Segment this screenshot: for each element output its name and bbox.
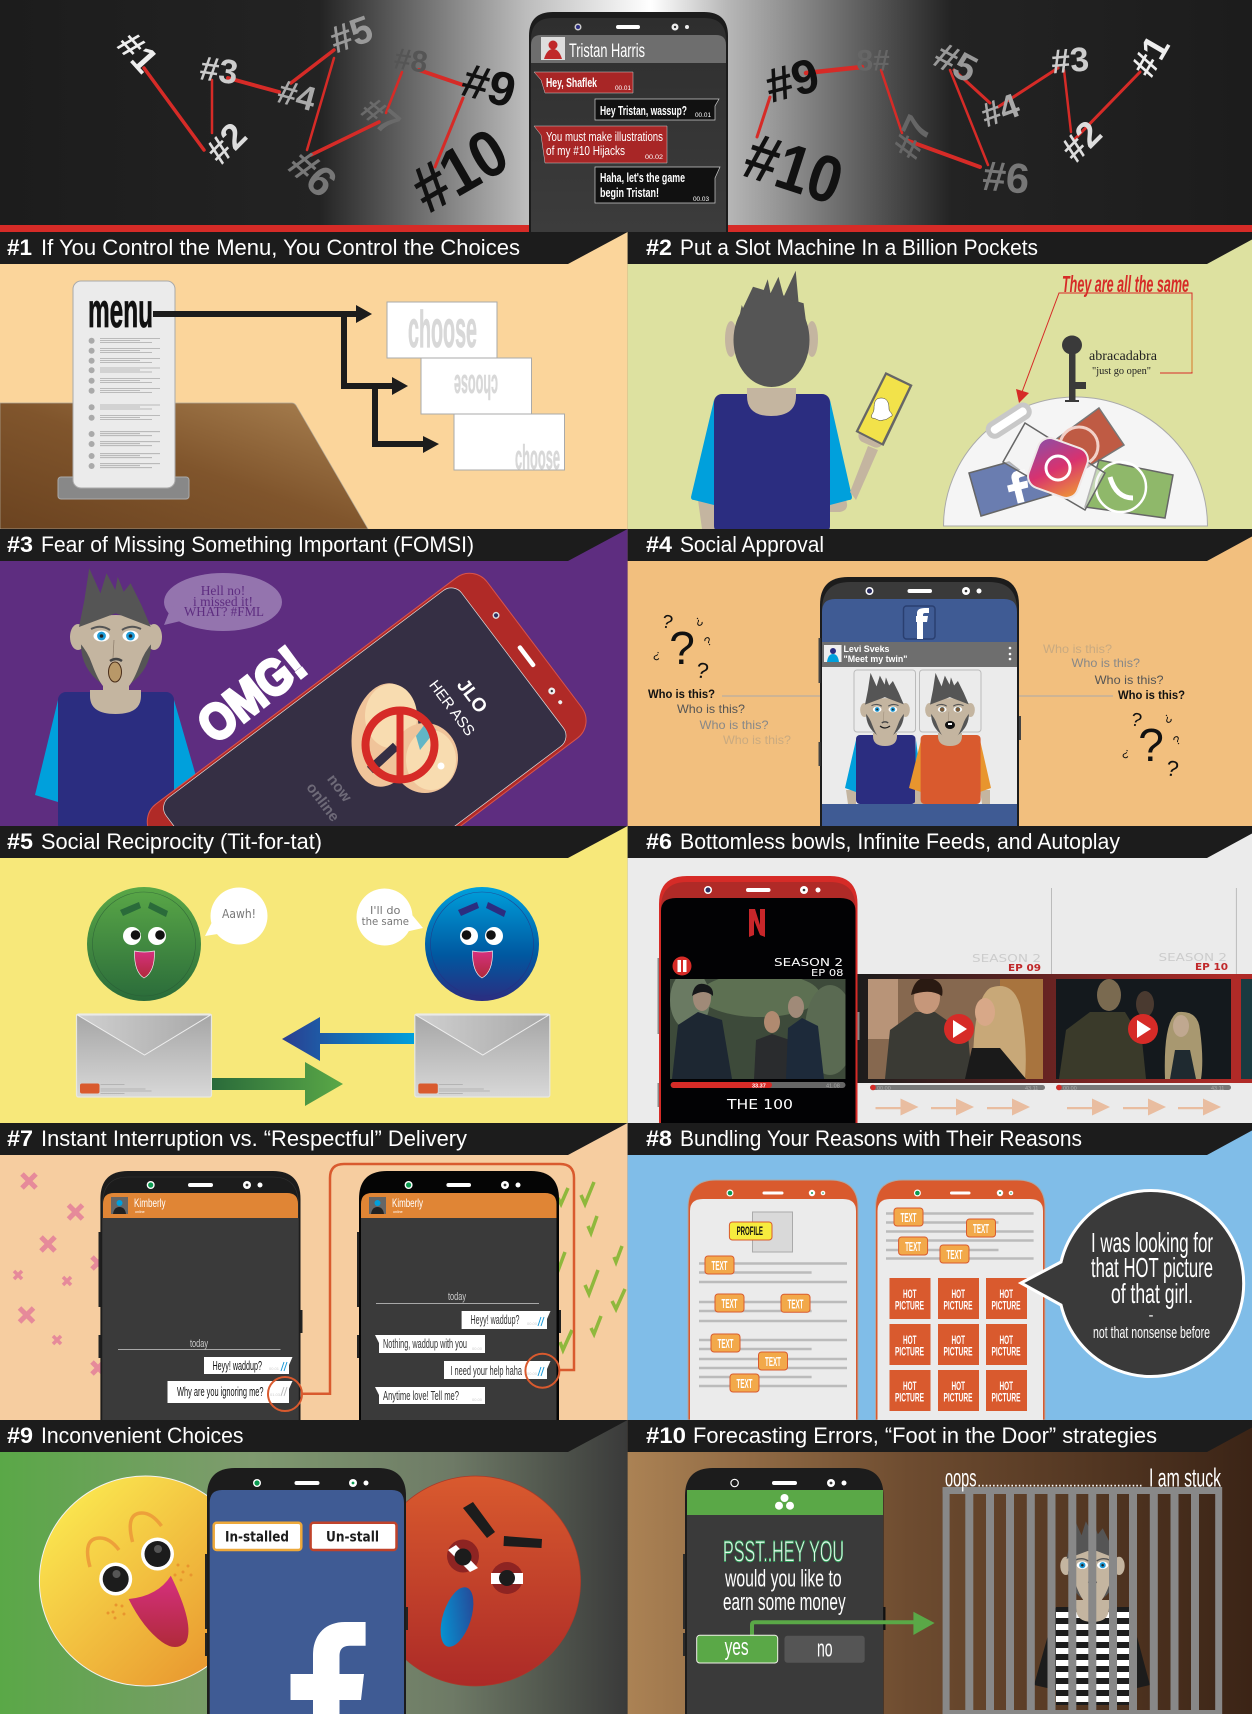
heading #1: If You Control the Menu, You Control the Choices	[41, 235, 520, 260]
abracadabra lever	[1062, 336, 1158, 402]
playback bar	[671, 1082, 846, 1090]
phone with offer: earn some money	[723, 1589, 846, 1616]
heading #6: #6	[646, 829, 672, 854]
heading #10: Forecasting Errors, “Foot in the Door” strategies	[693, 1423, 1157, 1448]
button: yes	[697, 1634, 778, 1663]
who is this text, right: Who is this?	[1118, 688, 1185, 702]
chat phone: 00.01	[615, 86, 632, 92]
phone with facebook post: "Meet my twin"	[844, 654, 908, 665]
hijack numbers, right: #5	[927, 35, 984, 92]
abracadabra lever: abracadabra	[1089, 349, 1158, 364]
happy yellow face	[39, 1476, 251, 1686]
phone A: today	[190, 1338, 208, 1350]
speech bubble	[164, 573, 282, 631]
hijack numbers, left: #3	[198, 49, 240, 92]
hijack numbers, left: #4	[274, 73, 320, 119]
phone with offer	[683, 1468, 886, 1714]
progress bars: 43.11	[1025, 1086, 1038, 1092]
who is this text, left: Who is this?	[677, 702, 745, 716]
question marks, left: ?	[702, 634, 715, 649]
angry red face	[371, 1476, 581, 1686]
panel 3: FOMSI	[0, 529, 628, 826]
heading #9: #9	[7, 1423, 33, 1448]
chat phone: of my #10 Hijacks	[546, 143, 625, 158]
table	[0, 403, 368, 529]
phone left: profile	[688, 1180, 858, 1420]
panel 6: infinite feeds	[628, 826, 1252, 1123]
choice cards: choose	[408, 301, 477, 359]
hijack numbers, right: #9	[760, 49, 825, 114]
hijack numbers, right: #3	[1050, 40, 1091, 81]
chat phone: Hey, Shaflek	[546, 75, 598, 90]
bubble: I'll do the same: I'll do	[370, 904, 401, 917]
netflix phone: THE 100	[726, 1098, 793, 1113]
choice cards	[387, 301, 564, 477]
chat phone: Tristan Harris	[569, 41, 645, 62]
heading #8: Bundling Your Reasons with Their Reasons	[680, 1126, 1082, 1151]
who is this text, right: Who is this?	[1095, 673, 1164, 687]
episode labels: EP 09	[1008, 963, 1041, 974]
episode labels: SEASON 2	[972, 952, 1041, 965]
heading #7	[0, 1123, 628, 1155]
who is this text, right: Who is this?	[1043, 642, 1112, 656]
phone A: Kimberly	[134, 1196, 166, 1210]
phone A: 01.03	[270, 1392, 281, 1397]
panel 8: bundling reasons	[628, 1123, 1252, 1420]
question marks, left: ?	[652, 648, 662, 663]
profile tag	[729, 1222, 772, 1240]
branching arrows	[153, 305, 439, 453]
heading #1: #1	[7, 235, 32, 260]
red connector lines, right	[757, 67, 1140, 167]
prisoner	[1034, 1518, 1150, 1705]
hijack numbers, right: 8#	[856, 44, 890, 78]
envelope right	[415, 1014, 550, 1097]
chat phone: 00.01	[695, 113, 712, 119]
panel 1: menu: choose	[515, 439, 560, 477]
hijack numbers, right: #4	[976, 86, 1025, 135]
who is this text, left	[648, 687, 791, 747]
play buttons	[944, 1014, 1158, 1044]
panel 5: social reciprocity	[0, 826, 628, 1123]
heading #4	[628, 529, 1252, 561]
caption: they are all the same	[1016, 271, 1192, 403]
question marks, left: ?	[669, 622, 695, 674]
chat phone: 00.03	[693, 197, 710, 203]
orange link with highlight rings	[268, 1164, 574, 1411]
question marks, right: ?	[1129, 709, 1144, 732]
abracadabra lever: "just go open"	[1092, 366, 1151, 377]
phone right: hot pictures	[876, 1180, 1045, 1420]
heading #6: Bottomless bowls, Infinite Feeds, and Autoplay	[680, 829, 1120, 854]
heading #2: Put a Slot Machine In a Billion Pockets	[680, 235, 1038, 260]
chat phone	[529, 12, 728, 232]
question marks, right: ?	[1164, 755, 1181, 782]
blue return arrow	[282, 1017, 414, 1061]
prison bars	[943, 1487, 1222, 1714]
peach arrows	[876, 1098, 1221, 1116]
heading #8: #8	[646, 1126, 672, 1151]
hijack numbers, right: #2	[1052, 112, 1110, 170]
chat phone: Hey Tristan, wassup?	[600, 103, 687, 118]
question marks, left	[652, 611, 715, 684]
phone B	[357, 1171, 561, 1420]
phone A: Why are you ignoring me?	[177, 1384, 264, 1399]
OMG: OMG!	[187, 636, 316, 754]
phone notification text: now	[323, 771, 355, 806]
button: Un-stall: Un-stall	[326, 1530, 379, 1546]
phone with facebook post	[818, 577, 1021, 826]
bubble: I'll do the same: the same	[362, 915, 409, 928]
phone with uninstall buttons	[205, 1468, 408, 1714]
phone notification text: JLO	[452, 675, 491, 717]
phone B: Heyy! waddup?	[470, 1313, 520, 1327]
progress bars: 00.00	[1063, 1086, 1077, 1092]
question marks, right: ?	[1161, 711, 1174, 726]
speech bubble	[1021, 1190, 1244, 1376]
caption: oops I am stuck: oops	[945, 1465, 976, 1493]
progress bars: 43.11	[1211, 1086, 1224, 1092]
blue face	[425, 887, 539, 1001]
who is this text, left: Who is this?	[700, 718, 769, 732]
question marks, right: ?	[1121, 746, 1131, 761]
hijack numbers, right: #10	[736, 118, 852, 218]
hijack numbers, left	[109, 8, 521, 227]
phone B: online	[393, 1209, 403, 1214]
heading #4: Social Approval	[680, 532, 824, 557]
profile tag: PROFILE	[737, 1224, 763, 1238]
question marks, left: ?	[692, 614, 705, 629]
phone B: Anytime love! Tell me?	[383, 1389, 459, 1403]
question marks, right: ?	[1138, 719, 1164, 771]
phone B: I need your help haha	[450, 1364, 522, 1378]
menu stand	[58, 281, 189, 499]
app icon	[775, 1494, 794, 1510]
autoplay strip	[858, 888, 1252, 1083]
hijack numbers, left: #7	[354, 90, 407, 143]
heading #4: #4	[646, 532, 673, 557]
chat phone: Haha, let's the game	[600, 170, 685, 185]
header: ten hijacks constellation and chat phone	[0, 0, 1252, 232]
heading #8	[628, 1123, 1252, 1155]
phone B: 00.00	[472, 1346, 483, 1351]
hijack numbers, left: #9	[456, 54, 521, 119]
button: Un-stall	[311, 1523, 396, 1550]
phone B: Nothing, waddup with you	[383, 1337, 467, 1351]
episode 10 still	[1056, 979, 1231, 1079]
twin with orange shirt	[909, 673, 991, 804]
heading #10: #10	[646, 1423, 686, 1448]
button: In-stalled: In-stalled	[225, 1530, 289, 1546]
episode labels: SEASON 2	[1158, 951, 1227, 964]
heading #6	[628, 826, 1252, 858]
speech bubble: -	[1148, 1307, 1154, 1324]
hijack numbers, left: #2	[197, 114, 255, 172]
hijack numbers, left: #5	[324, 8, 378, 62]
person from behind holding phone	[691, 271, 913, 534]
phone B: today	[448, 1291, 466, 1303]
pink crosses	[14, 1174, 104, 1374]
netflix phone: SEASON 2	[774, 956, 843, 969]
heading #2	[628, 232, 1252, 264]
green send arrow	[212, 1062, 343, 1106]
bubble: Aawh: Aawh!	[222, 907, 256, 921]
heading #5: #5	[7, 829, 33, 854]
phone A: Heyy! waddup?	[212, 1359, 262, 1373]
heading #3: #3	[7, 532, 33, 557]
heading #3: Fear of Missing Something Important (FOMSI)	[41, 532, 474, 557]
arrow from yes to jail	[752, 1612, 935, 1635]
button: no	[784, 1636, 865, 1663]
phone screen content: blurred photo and prohibition sign	[345, 679, 458, 793]
chat phone: begin Tristan!	[600, 185, 659, 200]
who is this text, right: Who is this?	[1072, 656, 1140, 670]
heading #2: #2	[646, 235, 672, 260]
hijack numbers, left: #8	[392, 42, 430, 80]
episode labels	[972, 951, 1228, 974]
hijack numbers, left: #10	[398, 114, 520, 227]
chat phone: You must make illustrations	[546, 129, 663, 144]
heading #1	[0, 232, 628, 264]
phone A: 00.01	[269, 1366, 280, 1371]
heading #5: Social Reciprocity (Tit-for-tat)	[41, 829, 322, 854]
hijack numbers, right: #6	[981, 152, 1031, 203]
question marks, left: ?	[660, 611, 675, 634]
panel 9: inconvenient choices	[0, 1420, 628, 1714]
chat phone: 00.02	[645, 155, 664, 161]
netflix phone: EP 08	[811, 968, 844, 979]
button: yes: yes	[725, 1634, 749, 1661]
twin with blue shirt	[845, 673, 924, 804]
heading #9	[0, 1420, 628, 1452]
hijack numbers, left: #1	[109, 23, 167, 81]
speech bubble: WHAT? #FML	[184, 604, 264, 619]
speech bubble: of that girl.	[1111, 1278, 1193, 1309]
phone notification text: online	[303, 780, 343, 825]
red connector lines, left	[144, 50, 463, 167]
episode 09 still	[868, 978, 1043, 1079]
phone A	[98, 1171, 302, 1420]
choice cards: choose	[454, 367, 498, 405]
green face	[87, 887, 201, 1001]
question marks, left: ?	[694, 657, 711, 684]
panel 4: social approval	[628, 529, 1252, 826]
bubble: I'll do the same	[356, 888, 423, 946]
episode labels: EP 10	[1195, 962, 1228, 973]
pause icon	[672, 956, 692, 976]
connector lines	[722, 695, 1113, 697]
hijack numbers, left: #6	[280, 140, 346, 206]
heading #10	[628, 1420, 1252, 1452]
who is this text, left: Who is this?	[648, 687, 715, 701]
question marks, right	[1121, 709, 1184, 782]
menu stand: menu	[88, 285, 153, 338]
button: In-stalled	[214, 1523, 301, 1550]
phone notification text: HER ASS	[425, 677, 478, 739]
hijack numbers, right	[736, 28, 1178, 218]
heading #3	[0, 529, 628, 561]
phone with offer: would you like to	[724, 1566, 842, 1593]
heading #9: Inconvenient Choices	[41, 1423, 244, 1448]
netflix logo	[749, 909, 765, 937]
heading #7: #7	[7, 1126, 33, 1151]
panel 10: forecasting errors	[628, 1420, 1252, 1714]
bubble: Aawh	[205, 888, 268, 944]
panel 7: instant interruption	[0, 1123, 628, 1420]
phone A: online	[135, 1209, 145, 1214]
who is this text, right	[1043, 642, 1185, 702]
panel 1: menu	[0, 232, 628, 529]
green checks	[557, 1182, 625, 1350]
phone B: Kimberly	[392, 1196, 423, 1210]
speech bubble: i missed it!	[193, 594, 253, 609]
caption: oops I am stuck: .............................................	[977, 1474, 1143, 1491]
phone B: 00.00	[527, 1371, 538, 1376]
phone B: 00.00	[527, 1321, 538, 1326]
progress bars: 00.00	[877, 1086, 891, 1092]
shocked person	[35, 568, 200, 832]
heading #7: Instant Interruption vs. “Respectful” Delivery	[41, 1126, 467, 1151]
caption: oops I am stuck	[945, 1463, 1222, 1493]
question marks, right: ?	[1171, 733, 1184, 748]
envelope left	[76, 1014, 212, 1097]
phone notification text	[308, 680, 486, 822]
phone with offer: PSST..HEY YOU	[723, 1536, 844, 1569]
playback bar: 41.08	[826, 1084, 840, 1090]
phone with facebook post: Levi Sveks	[844, 644, 890, 655]
button: no: no	[817, 1636, 833, 1663]
netflix phone	[658, 876, 860, 1123]
playback bar: 33.37	[752, 1084, 766, 1090]
tilted phone	[146, 572, 587, 826]
speech bubble: Hell no!	[201, 583, 245, 598]
progress bars	[870, 1085, 1231, 1092]
phone B: 00.00	[472, 1397, 483, 1402]
hijack numbers, right: #7	[885, 110, 941, 166]
panel 2: slot machine	[628, 232, 1252, 534]
episode 08 still	[670, 979, 846, 1079]
heading #5	[0, 826, 628, 858]
glass dome with phones	[944, 397, 1208, 526]
facebook f	[290, 1622, 366, 1714]
hijack numbers, right: #1	[1122, 28, 1178, 84]
who is this text, left: Who is this?	[723, 733, 791, 747]
